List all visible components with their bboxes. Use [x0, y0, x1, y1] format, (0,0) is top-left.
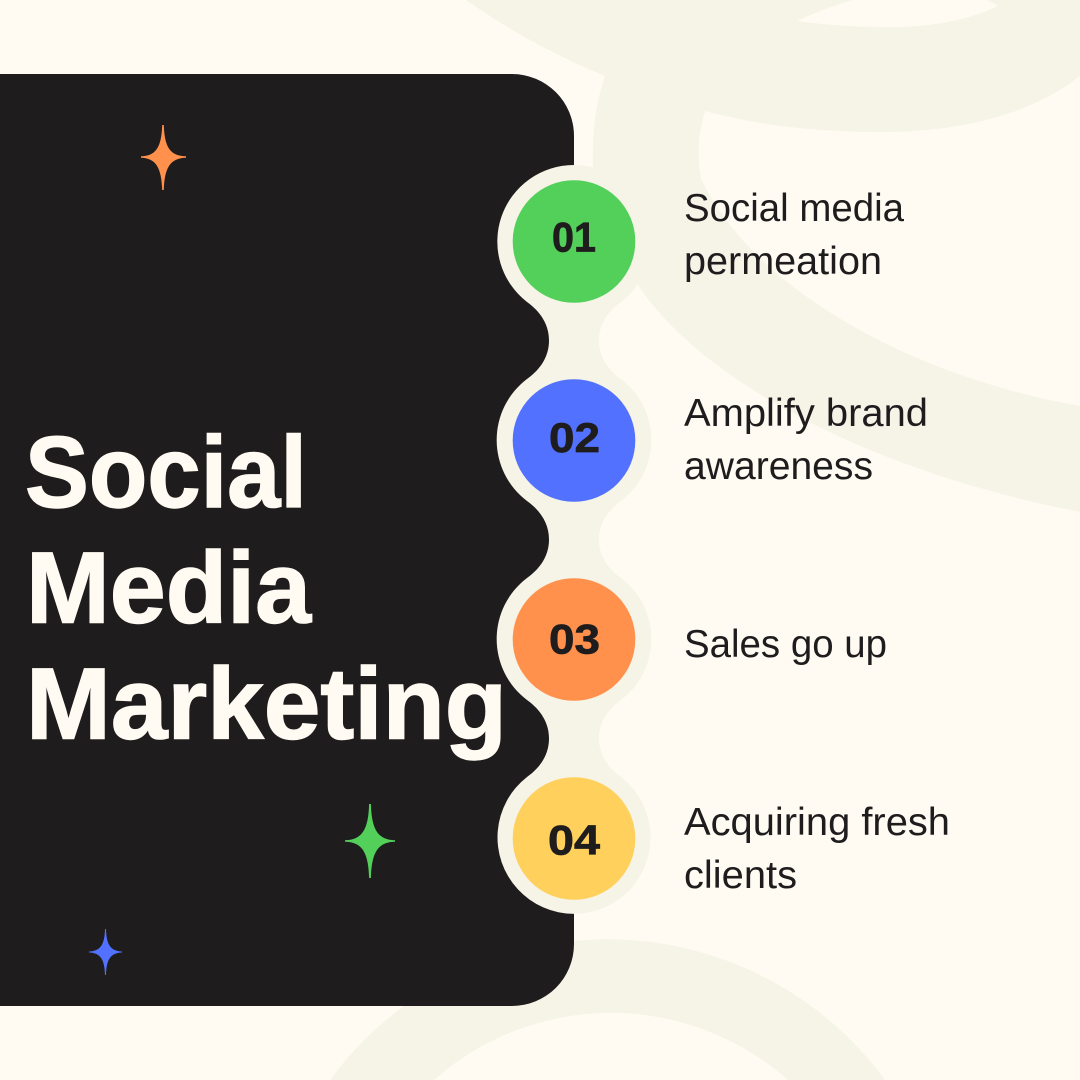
step 04: badge: 04 [548, 816, 601, 864]
step 04: label: Acquiring fresh [684, 801, 950, 844]
background swirl: bottom arc [330, 939, 885, 1080]
icon: green sparkle [345, 804, 395, 878]
step 01: badge [513, 180, 635, 303]
step 04: label [684, 801, 950, 897]
step 01: label: permeation [684, 240, 882, 283]
step 01: badge: 01 [552, 214, 596, 260]
step 02: label [684, 392, 928, 488]
panel: dark title panel [0, 74, 574, 1006]
icon: orange sparkle [141, 125, 186, 190]
step 02: label: awareness [684, 445, 873, 488]
icon: blue sparkle [89, 929, 122, 975]
connector: wavy ring band around number badges [497, 165, 651, 914]
background swirl: top [466, 0, 1080, 512]
title [25, 417, 507, 760]
step 03: label: Sales go up [684, 623, 887, 666]
title: Marketing [26, 648, 507, 760]
step 04: label: clients [684, 854, 797, 897]
step 01: label [684, 187, 904, 283]
step 03: badge [513, 578, 635, 701]
step 02: label: Amplify brand [684, 392, 928, 435]
title: Social [25, 417, 307, 529]
step 01: label: Social media [684, 187, 904, 230]
step 02: badge: 02 [549, 414, 600, 461]
step 04: badge [513, 777, 635, 900]
title: Media [26, 532, 312, 644]
step 02: badge [513, 379, 635, 502]
step 03: badge: 03 [549, 616, 600, 662]
